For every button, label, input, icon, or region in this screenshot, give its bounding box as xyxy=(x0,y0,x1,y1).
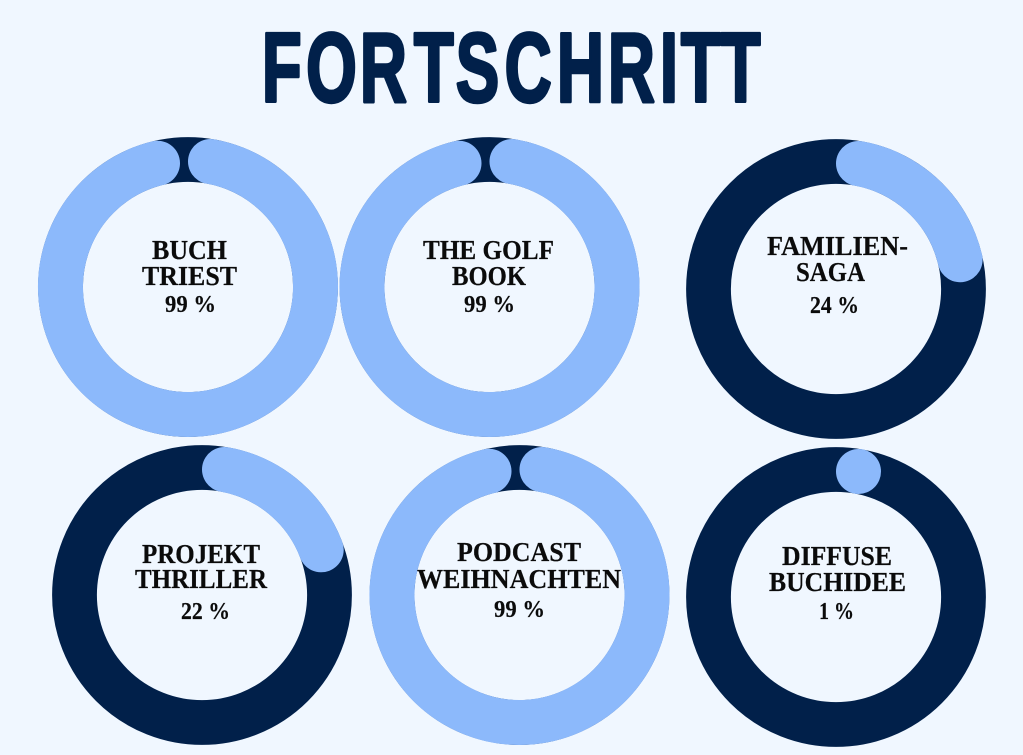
panel: Podcast Weihnachten ring xyxy=(392,468,647,722)
label: Projekt Thriller: 22 % xyxy=(181,599,230,625)
panel: Diffuse Buchidee ring xyxy=(708,449,964,724)
panel: Projekt Thriller ring xyxy=(74,468,330,722)
label: Podcast Weihnachten: WEIHNACHTEN xyxy=(417,564,621,594)
panel: Familiensaga ring xyxy=(708,162,964,416)
label: The Golf Book: 99 % xyxy=(464,292,515,318)
label: Projekt Thriller xyxy=(135,539,267,625)
label: Buch Triest: TRIEST xyxy=(142,261,237,291)
label: Buch Triest xyxy=(142,235,237,318)
label: Diffuse Buchidee: 1 % xyxy=(819,599,854,625)
label: The Golf Book: BOOK xyxy=(452,261,526,291)
label: Projekt Thriller: PROJEKT xyxy=(142,539,260,569)
label: Diffuse Buchidee xyxy=(769,541,906,625)
panel: Buch Triest ring xyxy=(60,160,316,414)
label: The Golf Book: THE GOLF xyxy=(423,235,554,265)
label: Podcast Weihnachten xyxy=(417,537,621,623)
label: Familiensaga xyxy=(767,231,908,319)
label: Buch Triest: 99 % xyxy=(165,292,216,318)
label: Projekt Thriller: THRILLER xyxy=(135,564,267,594)
label: Diffuse Buchidee: BUCHIDEE xyxy=(769,567,906,597)
panel: The Golf Book ring xyxy=(362,160,617,414)
label: Buch Triest: BUCH xyxy=(152,235,227,265)
label: Familiensaga: SAGA xyxy=(796,257,865,287)
label: Diffuse Buchidee: DIFFUSE xyxy=(782,541,892,571)
label: Familiensaga: 24 % xyxy=(810,293,859,319)
label: The Golf Book xyxy=(423,235,554,318)
label: Podcast Weihnachten: 99 % xyxy=(494,597,545,623)
label: Familiensaga: FAMILIEN- xyxy=(767,231,908,261)
title: FORTSCHRITT xyxy=(262,13,761,123)
label: Podcast Weihnachten: PODCAST xyxy=(457,537,581,567)
